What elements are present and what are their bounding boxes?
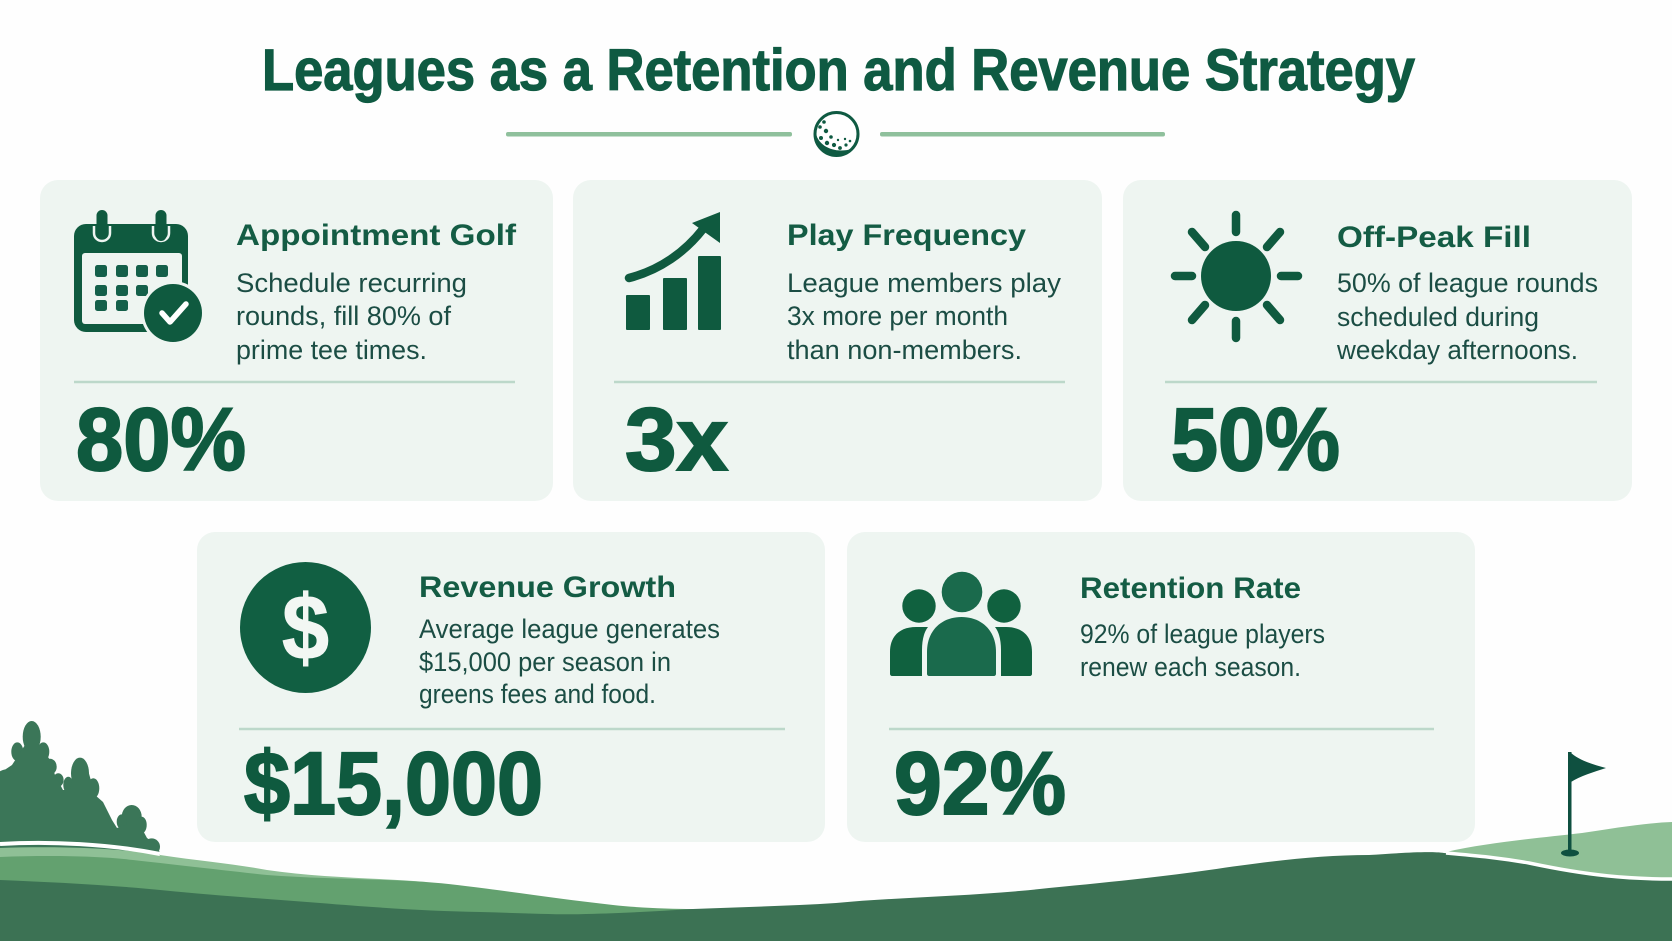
- description: [419, 614, 720, 709]
- icon: golf ball: [815, 112, 858, 156]
- description: renew each season.: [1080, 652, 1301, 682]
- title divider with golf ball: [506, 112, 1165, 156]
- title: Leagues as a Retention and Revenue Strategy: [262, 38, 1415, 103]
- heading: Play Frequency: [787, 219, 1026, 252]
- panel: retention rate: [847, 532, 1475, 842]
- description: $15,000 per season in: [419, 647, 671, 677]
- description: prime tee times.: [236, 335, 427, 365]
- description: Schedule recurring: [236, 268, 467, 298]
- trees: [0, 721, 160, 870]
- description: 50% of league rounds: [1337, 268, 1598, 298]
- description: 3x more per month: [787, 301, 1008, 331]
- description: greens fees and food.: [419, 679, 656, 709]
- description: [236, 268, 467, 365]
- heading: Retention Rate: [1080, 572, 1301, 605]
- hills and fairway: [0, 822, 1672, 941]
- heading: Off-Peak Fill: [1337, 221, 1531, 254]
- white edge lines: [0, 843, 160, 854]
- description: weekday afternoons.: [1336, 335, 1578, 365]
- description: [1080, 619, 1325, 682]
- icon: rising bar chart: [626, 212, 721, 330]
- description: League members play: [787, 268, 1062, 298]
- icon: sun: [1175, 215, 1298, 338]
- icon: calendar with check: [74, 210, 205, 345]
- panel: play frequency: [573, 180, 1102, 501]
- stat: $15,000: $15,000: [244, 733, 543, 833]
- stat: 50%: 50%: [1171, 389, 1340, 489]
- description: [1336, 268, 1598, 365]
- description: than non-members.: [787, 335, 1022, 365]
- panel: off-peak fill: [1123, 180, 1632, 501]
- icon: dollar coin: [240, 562, 371, 693]
- stat: 92%: 92%: [894, 733, 1066, 833]
- panel: revenue growth: [197, 532, 825, 842]
- stat: 80%: 80%: [76, 389, 246, 489]
- description: 92% of league players: [1080, 619, 1325, 649]
- description: scheduled during: [1337, 302, 1539, 332]
- heading: Revenue Growth: [419, 571, 676, 604]
- icon: golf flag: [1561, 752, 1606, 856]
- stat: 3x: 3x: [625, 389, 728, 489]
- icon: dollar coin: $: [282, 577, 329, 679]
- description: [787, 268, 1062, 365]
- panel: appointment golf: [40, 180, 553, 501]
- heading: Appointment Golf: [236, 219, 517, 252]
- right green hill: [1446, 822, 1672, 880]
- icon: group of people: [890, 572, 1032, 676]
- description: rounds, fill 80% of: [236, 301, 451, 331]
- description: Average league generates: [419, 614, 720, 644]
